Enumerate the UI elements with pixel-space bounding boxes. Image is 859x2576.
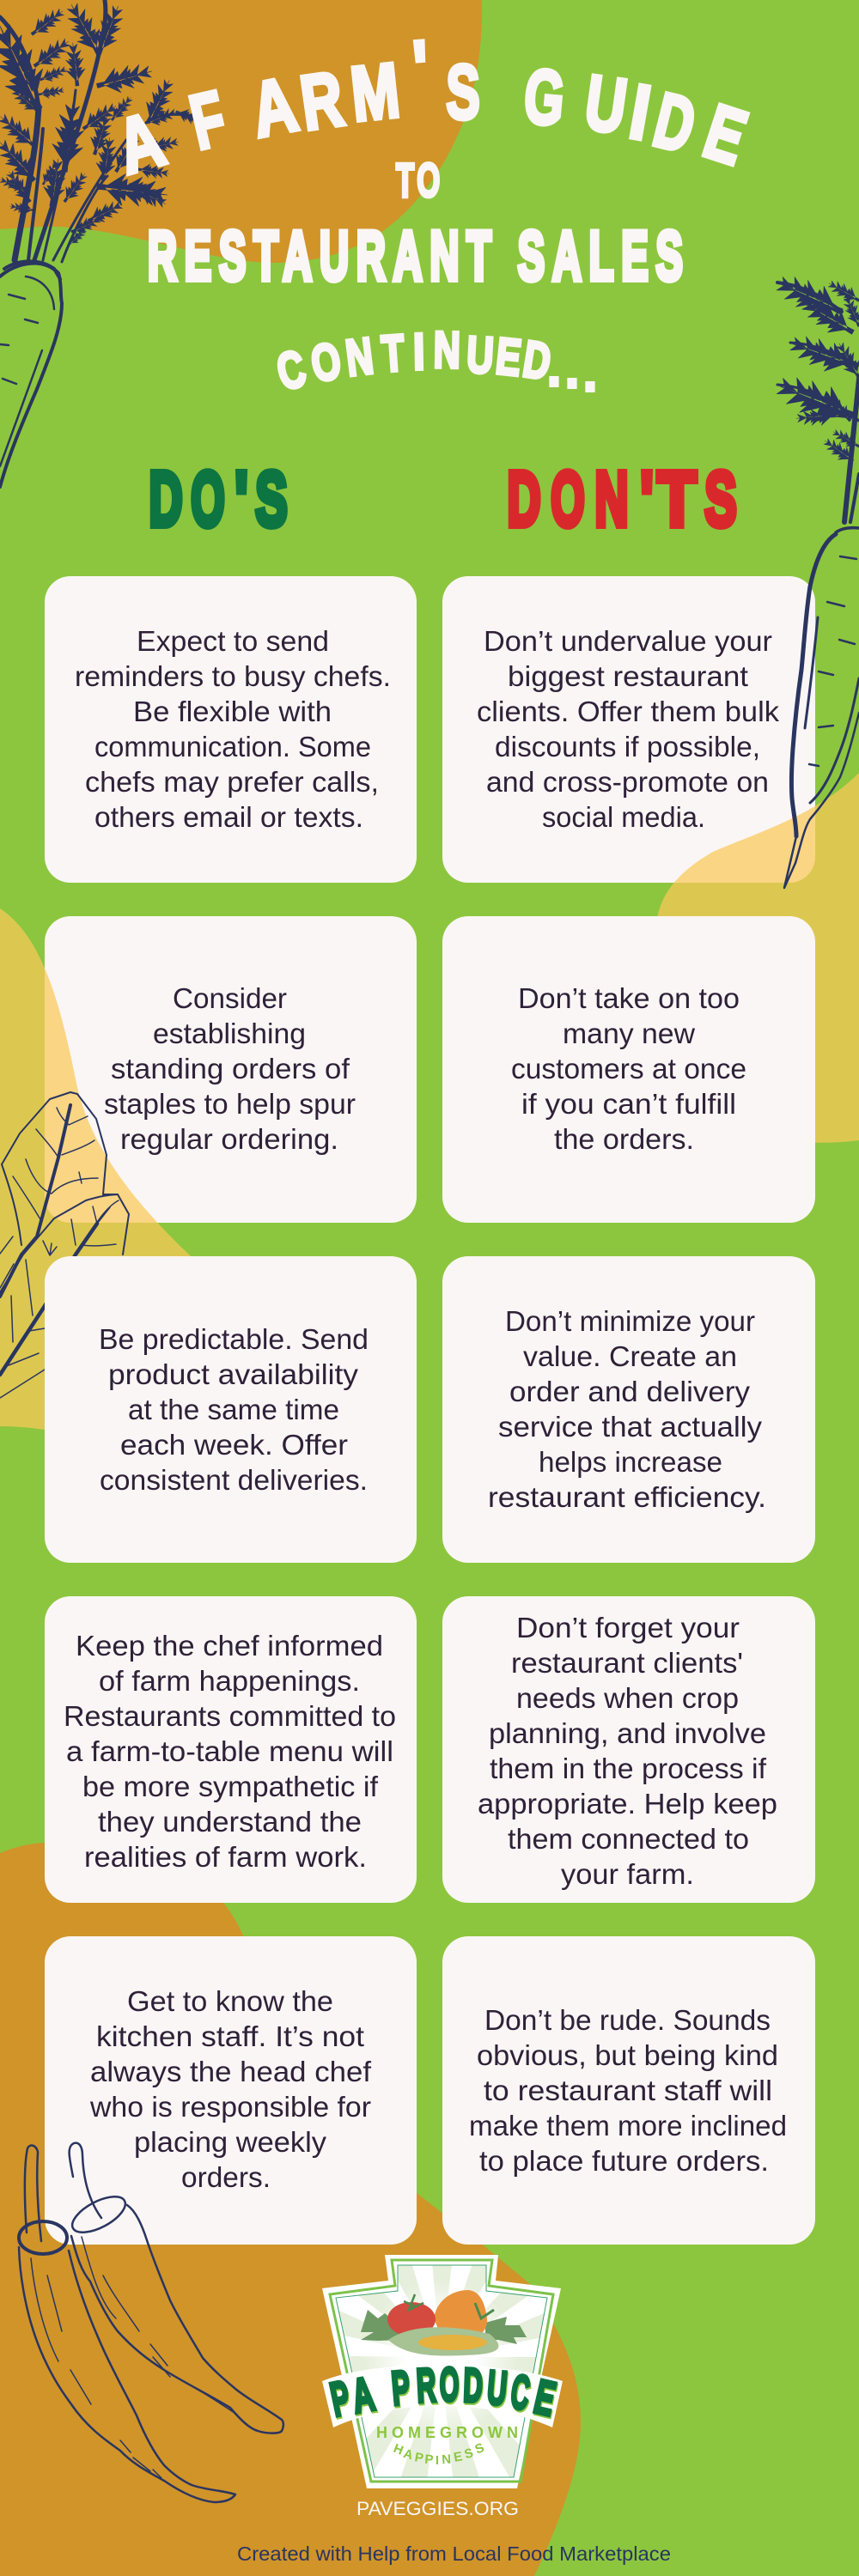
- title line: A Farm's Guide: G: [521, 53, 568, 143]
- panel: don't 1: [442, 576, 815, 883]
- card background: [45, 576, 417, 883]
- card text: if you can’t fulfill: [521, 1088, 736, 1120]
- card text: consistent deliveries.: [100, 1464, 368, 1496]
- logo name: E: [529, 2369, 560, 2426]
- title line: A Farm's Guide: I: [624, 68, 657, 156]
- card background: [442, 1256, 815, 1563]
- card text: regular ordering.: [120, 1123, 338, 1155]
- title line: continued: N: [433, 322, 461, 380]
- title line: continued: .: [547, 339, 561, 398]
- title line: continued: I: [412, 323, 425, 380]
- panel: don't 4: [442, 1596, 815, 1903]
- logo tagline 2: I: [436, 2453, 439, 2468]
- title line: continued: U: [466, 326, 495, 386]
- card text: Keep the chef informed: [76, 1630, 383, 1662]
- logo: PA Produce keystone: [322, 2255, 563, 2488]
- heading: do's: ': [235, 457, 247, 543]
- card text: establishing: [153, 1018, 306, 1049]
- logo vegetables: [361, 2290, 527, 2356]
- card text: many new: [563, 1018, 695, 1049]
- logo tagline 2: S: [472, 2440, 486, 2458]
- panel: don't 5: [442, 1936, 815, 2245]
- title line: A Farm's Guide: E: [694, 88, 757, 181]
- tomato: [387, 2302, 436, 2336]
- card text: [469, 2004, 787, 2177]
- logo name: A: [348, 2366, 378, 2423]
- heading: don'ts: [508, 455, 737, 543]
- carrot stems: [0, 0, 204, 262]
- title line: continued: E: [493, 328, 524, 387]
- title line: A Farm's Guide: ': [411, 25, 431, 112]
- carrot fronds: [0, 0, 206, 248]
- card text: order and delivery: [509, 1376, 751, 1407]
- card text: kitchen staff. It’s not: [96, 2020, 364, 2052]
- card text: clients. Offer them bulk: [477, 696, 780, 727]
- blob: brown top left: [0, 0, 482, 263]
- title line: A Farm's Guide: A: [245, 61, 304, 155]
- logo green border: [330, 2260, 553, 2482]
- title: [108, 25, 757, 403]
- card text: Expect to send: [137, 625, 329, 657]
- card text: at the same time: [128, 1394, 339, 1425]
- website: PAVEGGIES.ORG: [356, 2498, 519, 2519]
- card text: restaurant clients': [511, 1647, 743, 1679]
- card text: be more sympathetic if: [82, 1771, 379, 1802]
- logo name: D: [462, 2358, 484, 2413]
- card text: discounts if possible,: [495, 731, 760, 762]
- title line: Restaurant Sales: RESTAURANT SALES: [148, 217, 691, 295]
- card text: Don’t be rude. Sounds: [484, 2004, 771, 2036]
- logo tagline 2: N: [442, 2452, 452, 2467]
- right pepper: [67, 2143, 283, 2433]
- card text: Don’t take on too: [518, 982, 740, 1014]
- heading: don'ts: T: [657, 457, 697, 543]
- heading: don'ts: N: [595, 456, 628, 542]
- card text: needs when crop: [516, 1682, 739, 1714]
- logo name: U: [485, 2360, 509, 2415]
- title line: continued: [271, 322, 597, 403]
- card text: planning, and involve: [489, 1717, 766, 1749]
- card text: Don’t minimize your: [505, 1305, 755, 1337]
- logo tagline 2: P: [413, 2450, 424, 2466]
- card text: Don’t undervalue your: [484, 625, 772, 657]
- logo tagline 2: P: [424, 2452, 434, 2467]
- card text: make them more inclined: [469, 2110, 787, 2142]
- title line: continued: O: [307, 332, 345, 393]
- card text: to restaurant staff will: [484, 2075, 772, 2106]
- card text: [488, 1305, 766, 1513]
- logo name: [326, 2358, 560, 2427]
- card text: [104, 982, 356, 1155]
- card text: Be predictable. Send: [99, 1323, 369, 1355]
- card background: [442, 916, 815, 1223]
- card text: your farm.: [561, 1858, 694, 1890]
- card background: [45, 1256, 417, 1563]
- logo white keystone: [322, 2255, 561, 2488]
- logo tagline 2: E: [453, 2449, 464, 2465]
- title line: A Farm's Guide: D: [646, 76, 704, 170]
- card text: the orders.: [554, 1123, 694, 1155]
- card text: value. Create an: [523, 1340, 737, 1372]
- heading: do's: S: [255, 455, 288, 542]
- carrot stems: [777, 283, 859, 522]
- panel: do 5: [45, 1936, 417, 2245]
- card text: realities of farm work.: [84, 1841, 367, 1873]
- card text: biggest restaurant: [508, 660, 748, 692]
- logo tagline 2: S: [463, 2445, 475, 2462]
- card text: of farm happenings.: [99, 1665, 360, 1697]
- logo teal inner line: [336, 2265, 547, 2477]
- logo name: P: [389, 2360, 411, 2415]
- card text: [477, 625, 780, 833]
- card text: communication. Some: [94, 731, 371, 762]
- title line: A Farm's Guide: S: [446, 50, 480, 136]
- card text: and cross-promote on: [486, 766, 769, 798]
- card text: orders.: [181, 2161, 271, 2193]
- illustration: peppers: [19, 2143, 283, 2502]
- panel: don't 2: [442, 916, 815, 1223]
- logo tagline 2: [391, 2440, 486, 2468]
- title line: continued: C: [271, 340, 311, 402]
- card background: [45, 1596, 417, 1903]
- carrot body: [784, 528, 859, 888]
- card text: standing orders of: [111, 1053, 350, 1084]
- card text: they understand the: [98, 1806, 362, 1838]
- panel: do 3: [45, 1256, 417, 1563]
- carrot fronds: [771, 268, 859, 467]
- card text: appropriate. Help keep: [478, 1788, 777, 1820]
- credit: Created with Help from Local Food Marketplace: [237, 2543, 671, 2565]
- card text: [478, 1612, 777, 1890]
- left pepper: [19, 2146, 235, 2502]
- logo tagline 2: A: [402, 2446, 415, 2463]
- card text: [75, 625, 391, 833]
- card text: Get to know the: [127, 1985, 333, 2017]
- panel: do 1: [45, 576, 417, 883]
- card text: Restaurants committed to: [64, 1700, 396, 1732]
- illustration: leaves: [0, 1092, 129, 1398]
- blob: yellow right: [653, 773, 859, 1143]
- title line: continued: .: [565, 341, 579, 399]
- card text: chefs may prefer calls,: [85, 766, 379, 798]
- title line: A Farm's Guide: [108, 25, 757, 191]
- card text: social media.: [542, 801, 705, 833]
- card background: [45, 1936, 417, 2245]
- panel: don't 3: [442, 1256, 815, 1563]
- title line: continued: T: [380, 325, 406, 384]
- card text: placing weekly: [134, 2126, 327, 2158]
- card text: to place future orders.: [479, 2145, 769, 2177]
- title line: A Farm's Guide: U: [580, 58, 632, 150]
- title line: to: TO: [396, 154, 443, 207]
- leaves: [361, 2310, 404, 2341]
- title line: continued: N: [343, 328, 376, 388]
- illustration: left carrot: [0, 0, 206, 487]
- illustration: right carrot: [771, 268, 859, 888]
- card text: always the head chef: [90, 2056, 372, 2087]
- heading: don'ts: O: [551, 457, 585, 543]
- heading: do's: [149, 455, 288, 543]
- title line: A Farm's Guide: F: [183, 75, 234, 167]
- card text: each week. Offer: [120, 1429, 348, 1461]
- card background: [442, 1936, 815, 2245]
- card text: restaurant efficiency.: [488, 1481, 766, 1513]
- lower leaf: [0, 1194, 129, 1292]
- card background: [45, 916, 417, 1223]
- card text: customers at once: [511, 1053, 746, 1084]
- title line: A Farm's Guide: M: [347, 46, 404, 137]
- card text: a farm-to-table menu will: [66, 1735, 393, 1767]
- card background: [442, 576, 815, 883]
- logo sun rays: [355, 2271, 527, 2443]
- card text: [64, 1630, 396, 1873]
- card text: Be flexible with: [133, 696, 332, 727]
- card text: obvious, but being kind: [477, 2039, 778, 2071]
- card text: others email or texts.: [94, 801, 363, 833]
- blob: yellow left: [0, 908, 258, 1430]
- blob: brown bottom: [0, 1842, 581, 2576]
- card text: [511, 982, 746, 1155]
- panel: do 2: [45, 916, 417, 1223]
- heading: do's: D: [149, 456, 182, 542]
- card text: reminders to busy chefs.: [75, 660, 391, 692]
- logo tagline 2: H: [391, 2441, 405, 2458]
- upper leaf: [2, 1092, 107, 1194]
- heading: don'ts: ': [641, 457, 653, 543]
- title line: continued: .: [583, 344, 597, 403]
- card text: [89, 1985, 372, 2193]
- card text: them in the process if: [490, 1753, 767, 1784]
- title line: A Farm's Guide: A: [108, 96, 174, 191]
- panel: do 4: [45, 1596, 417, 1903]
- heading: don'ts: D: [508, 456, 540, 542]
- logo banner: [322, 2366, 563, 2427]
- card text: helps increase: [539, 1446, 722, 1478]
- corn husk: [388, 2327, 498, 2356]
- card text: [99, 1323, 369, 1496]
- logo name: C: [508, 2366, 533, 2421]
- corn: [418, 2335, 487, 2350]
- card text: Don’t forget your: [516, 1612, 740, 1643]
- logo name: R: [415, 2358, 437, 2413]
- title line: continued: D: [519, 331, 555, 392]
- heading: don'ts: S: [704, 455, 737, 542]
- logo name: P: [326, 2370, 355, 2427]
- pepper: [434, 2290, 487, 2336]
- logo name: O: [440, 2359, 459, 2412]
- card background: [442, 1596, 815, 1903]
- carrot body: [0, 261, 62, 487]
- card text: product availability: [108, 1358, 359, 1390]
- logo tagline: HOMEGROWN: [376, 2424, 522, 2441]
- card text: Consider: [173, 982, 287, 1014]
- card text: them connected to: [508, 1823, 749, 1855]
- heading: do's: O: [191, 457, 225, 543]
- title line: A Farm's Guide: R: [295, 55, 349, 146]
- card text: staples to help spur: [104, 1088, 356, 1120]
- card text: who is responsible for: [89, 2091, 371, 2123]
- card text: service that actually: [498, 1411, 763, 1443]
